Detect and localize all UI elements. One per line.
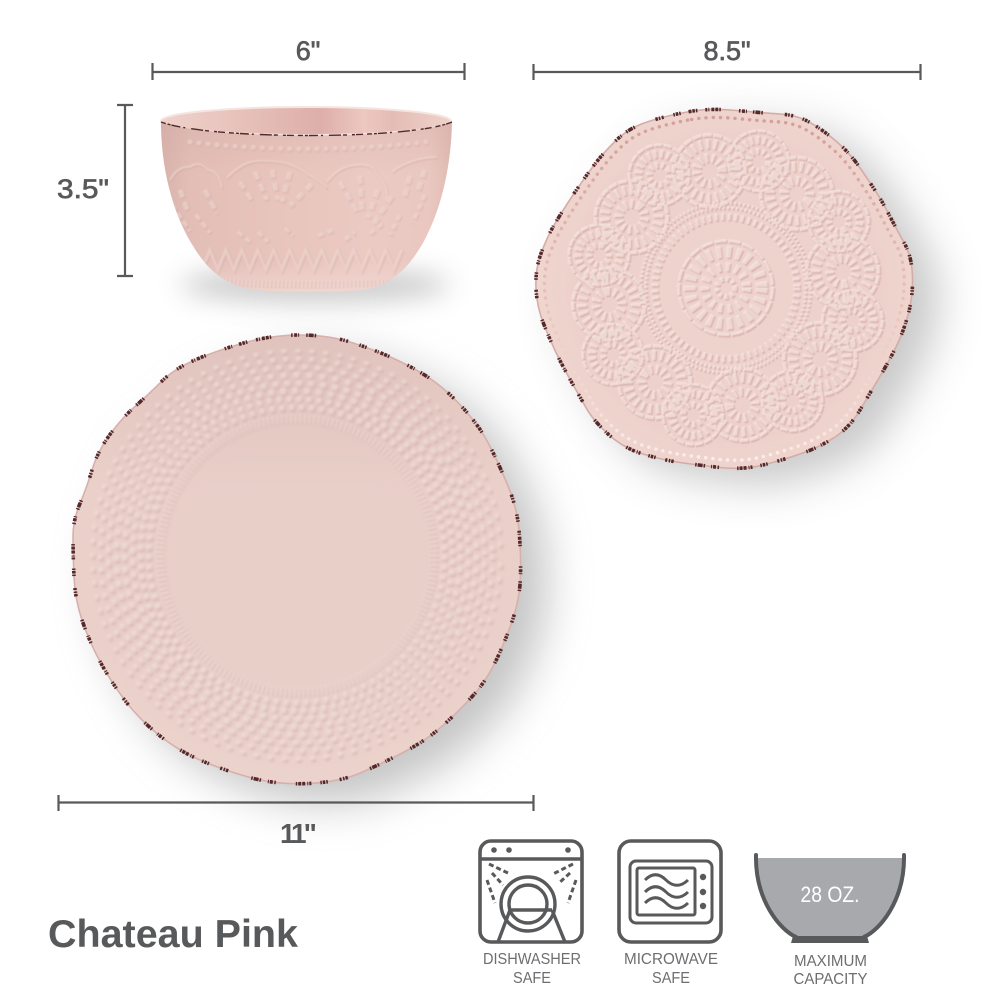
bowl vertical shading	[161, 122, 452, 292]
dinner plate pale edge	[73, 335, 521, 784]
title: Chateau Pink: Chateau Pink	[48, 913, 298, 956]
salad plate distressed brown rim	[536, 109, 913, 468]
label: microwave safe second line: SAFE	[652, 970, 690, 987]
salad plate drop shadow	[562, 125, 939, 484]
salad plate lace dark relief	[563, 126, 890, 452]
label: dishwasher safe: DISHWASHER	[483, 951, 581, 968]
bowl brown rim	[161, 122, 452, 136]
bowl body	[161, 122, 452, 292]
icon: maximum capacity bowl	[756, 855, 904, 943]
dinner plate tone	[73, 335, 521, 784]
dinner plate embossed light relief	[92, 351, 500, 759]
bowl embossed lace	[170, 142, 438, 285]
label: maximum capacity second line: CAPACITY	[794, 971, 868, 988]
salad plate lace light relief	[562, 124, 889, 451]
bowl	[161, 107, 452, 292]
dimension: salad plate width	[533, 36, 921, 80]
salad plate pale edge	[536, 109, 913, 468]
dinner plate distressed brown rim	[73, 335, 521, 784]
bowl interior	[161, 107, 451, 135]
dimension: salad plate width: 8.5"	[703, 36, 751, 66]
dimension: dinner plate width	[58, 795, 534, 849]
salad plate	[536, 109, 913, 468]
label: maximum capacity: MAXIMUM	[794, 953, 867, 970]
dimension: dinner plate width: 11"	[280, 818, 316, 849]
dimension: bowl width: 6"	[296, 36, 320, 66]
dinner plate drop shadow	[99, 355, 547, 804]
bowl drop shadow	[180, 267, 450, 303]
icon: dishwasher safe	[480, 841, 582, 942]
label: microwave safe: MICROWAVE	[624, 951, 718, 968]
label: dishwasher safe second line: SAFE	[513, 970, 551, 987]
dimension: bowl height: 3.5"	[57, 174, 109, 204]
dinner plate embossed dark relief	[94, 353, 502, 761]
salad plate body	[536, 109, 913, 468]
icon: microwave safe	[619, 841, 721, 942]
dinner plate	[73, 335, 521, 784]
icon: maximum capacity bowl: 28 OZ.	[800, 882, 860, 907]
dimension: bowl height	[57, 105, 133, 276]
dimension: bowl width	[152, 36, 465, 80]
dinner plate body	[73, 335, 521, 784]
salad plate embossed beads	[544, 117, 904, 460]
